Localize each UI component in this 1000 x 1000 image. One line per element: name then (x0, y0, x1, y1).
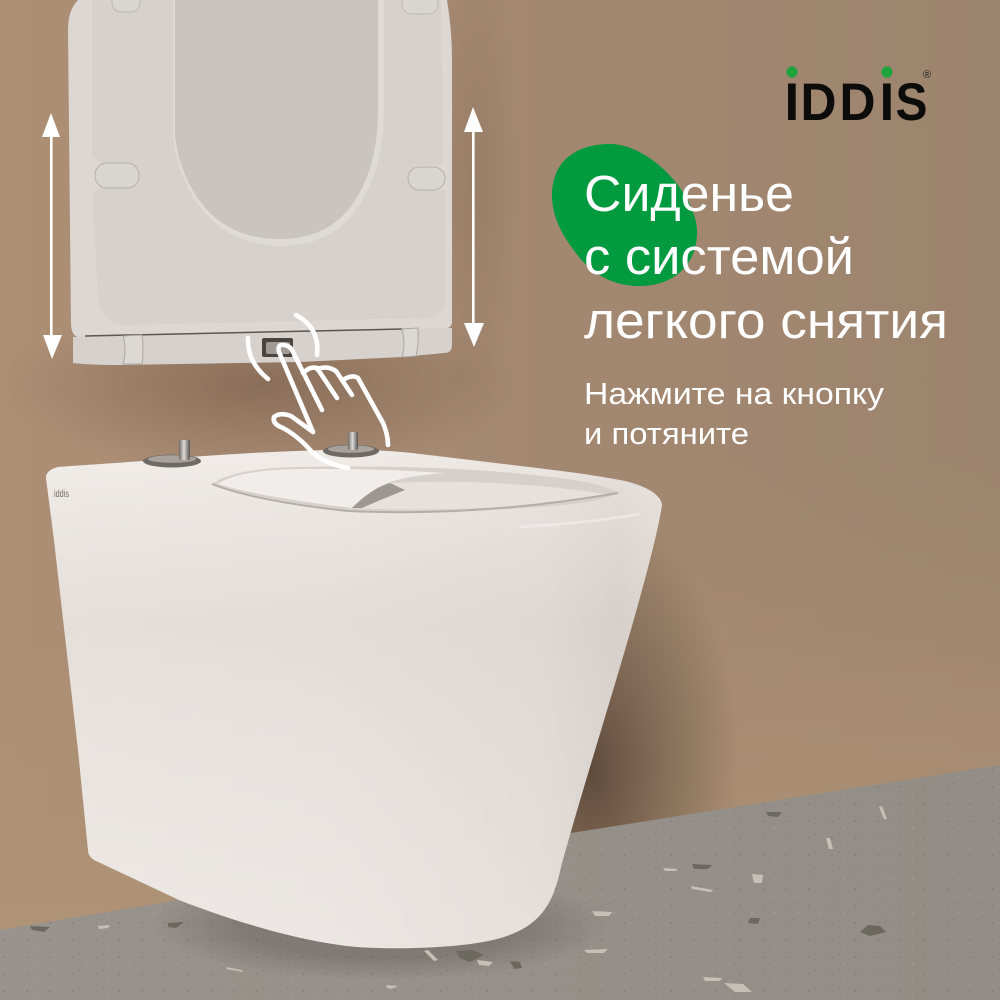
inner oval rim (173, 0, 384, 246)
seat bumpers (95, 163, 139, 188)
bowl body shading (46, 450, 662, 948)
bowl opening (212, 466, 618, 511)
lid outer shell (68, 0, 452, 337)
release button (262, 338, 293, 357)
floor (0, 765, 1000, 1000)
logo: D (800, 73, 836, 132)
toilet bowl (46, 432, 662, 948)
rim highlight (520, 514, 640, 527)
arrow: height right (464, 107, 484, 347)
brand mark on bowl: iddis (54, 489, 69, 500)
subheading: и потяните (584, 416, 749, 451)
logo: D (840, 73, 876, 132)
subheading: Нажмите на кнопку (584, 376, 885, 411)
logo: S (896, 73, 928, 132)
green blob (552, 144, 697, 286)
hinge bar (73, 328, 452, 365)
lid inner panel (92, 0, 446, 325)
heading: Сиденье (584, 165, 794, 222)
logo: I (880, 73, 894, 132)
logo: I (784, 73, 799, 132)
inner oval opening (175, 0, 378, 239)
toilet seat lid (68, 0, 452, 365)
green dots (786, 66, 798, 78)
left bolt (143, 440, 201, 468)
heading: с системой (584, 228, 854, 285)
arrow: height left (42, 113, 62, 359)
bowl body (46, 450, 662, 948)
bowl opening front surface (218, 469, 445, 508)
bowl wedge shadow (352, 483, 405, 508)
icon: hand pressing button (248, 315, 388, 468)
logo (784, 66, 931, 132)
bowl interior (352, 482, 606, 509)
right bolt (323, 432, 379, 458)
heading: легкого снятия (584, 292, 948, 349)
bowl lip (212, 484, 618, 512)
logo: ® (923, 69, 931, 81)
